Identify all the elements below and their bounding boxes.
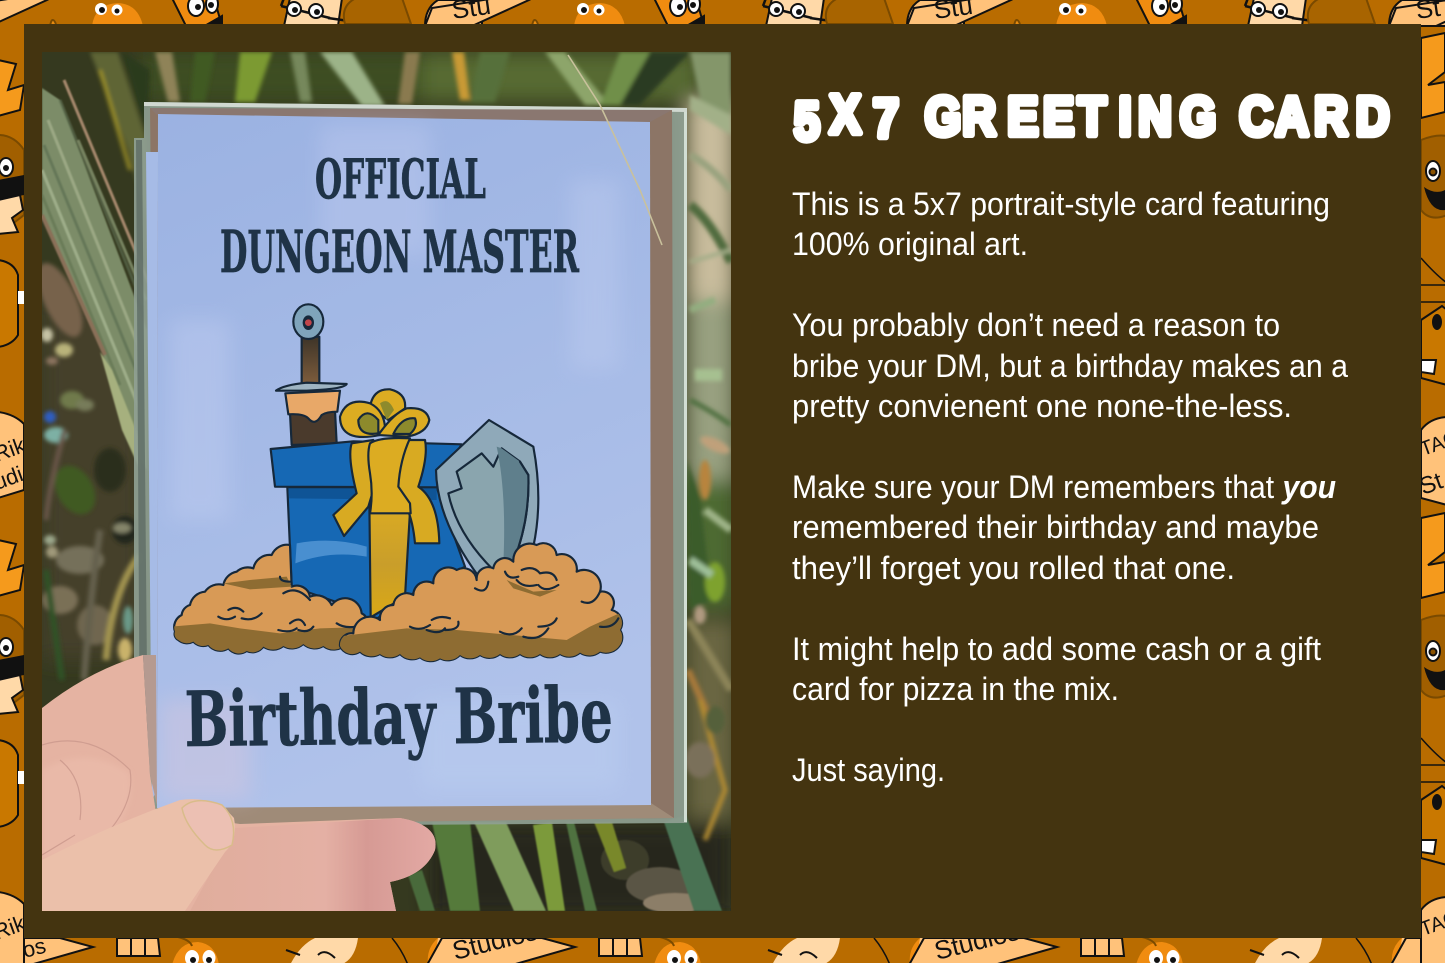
palm — [42, 655, 436, 911]
foliage background — [29, 52, 736, 915]
right text column — [792, 83, 1390, 788]
illustration: gift with sword, shield and coins — [170, 304, 627, 663]
paragraph 4 — [792, 631, 1321, 707]
gift box — [271, 441, 465, 623]
plastic sleeve — [134, 102, 687, 826]
shield — [436, 420, 538, 578]
ribbon and bow — [333, 389, 439, 617]
right coin pile — [337, 543, 627, 663]
sleeve over palm — [143, 655, 157, 805]
paragraph 3: remembered their birthday and maybe — [792, 509, 1319, 545]
paragraph 3: they’ll forget you rolled that one. — [792, 550, 1235, 586]
photo: hand holding greeting card in sleeve — [29, 52, 736, 915]
palm creases — [42, 741, 131, 855]
paragraph 1: 100% original art. — [792, 226, 1028, 262]
right foliage — [685, 155, 732, 840]
thumbnail — [182, 801, 234, 850]
paragraph 2: You probably don’t need a reason to — [792, 307, 1280, 343]
paragraph 4: It might help to add some cash or a gift — [792, 631, 1321, 667]
paragraph 5: Just saying. — [792, 752, 945, 788]
paragraph 3 — [792, 469, 1336, 586]
left pattern strip — [0, 60, 30, 963]
thumb — [42, 799, 235, 911]
paragraph 4: card for pizza in the mix. — [792, 671, 1119, 707]
sword — [276, 304, 347, 445]
paragraph 2: bribe your DM, but a birthday makes an a — [792, 348, 1348, 384]
paragraph 3: Make sure your DM remembers that you — [792, 469, 1336, 505]
large pale leaf left — [42, 78, 147, 462]
hand holding card — [42, 655, 436, 911]
heading: 5X7 GREETING CARD — [794, 83, 1390, 152]
paragraph 2: pretty convienent one none-the-less. — [792, 388, 1292, 424]
card title: DUNGEON MASTER: DUNGEON MASTER — [220, 218, 579, 286]
palm shading — [42, 758, 131, 860]
card caption: Birthday Bribe: Birthday Bribe — [184, 671, 613, 764]
lower grass and undergrowth — [408, 815, 722, 913]
card title: OFFICIAL: OFFICIAL — [315, 147, 486, 211]
left coin pile — [170, 545, 373, 660]
top foliage — [90, 52, 731, 178]
paragraph 2 — [792, 307, 1348, 424]
kraft envelope — [150, 108, 674, 824]
left foliage blotches — [42, 261, 134, 681]
paragraph 1 — [792, 186, 1330, 262]
paragraph 1: This is a 5x7 portrait-style card featuring — [792, 186, 1330, 222]
right pattern strip — [1416, 33, 1445, 963]
stray grass blade — [568, 55, 662, 245]
lower finger — [335, 818, 436, 911]
top pattern strip — [0, 0, 1445, 26]
card — [146, 114, 651, 808]
bottom pattern strip — [0, 916, 1445, 963]
